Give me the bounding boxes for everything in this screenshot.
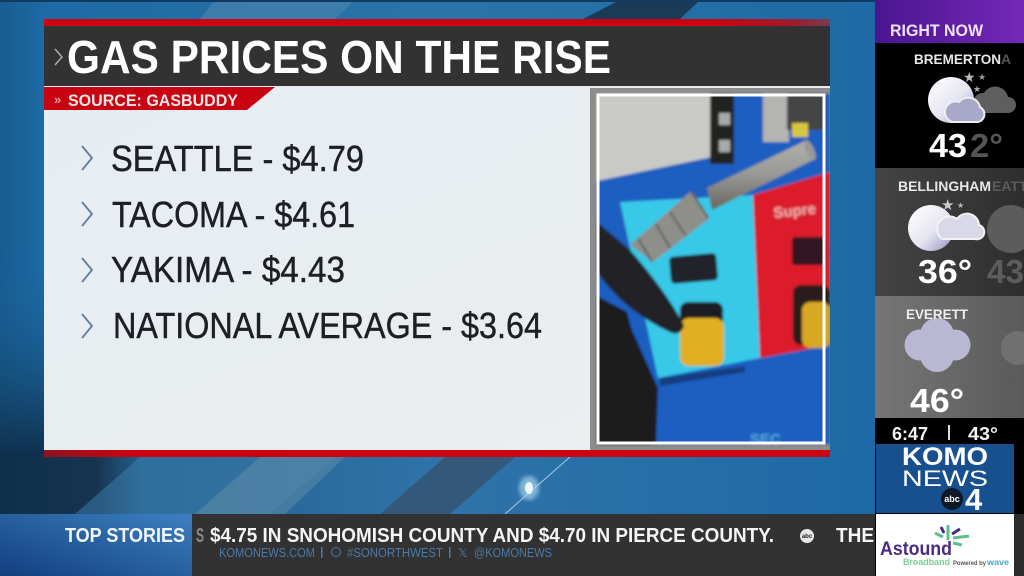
weather: Bellingham	[875, 168, 1024, 296]
weather: Bremerton: 2°	[970, 127, 1003, 164]
title bar	[44, 26, 830, 86]
panel: gas prices graphic	[44, 19, 830, 457]
right now header: RIGHT NOW	[890, 21, 984, 40]
item: Tacoma: TACOMA - $4.61	[112, 194, 355, 235]
weather: Bremerton: BREMERTON	[914, 51, 1001, 67]
source tag: »	[54, 92, 61, 107]
logo: Astound Broadband: wave	[986, 558, 1010, 567]
icon: moon and cloud	[928, 69, 1016, 123]
weather: Everett: EVERETT	[906, 306, 968, 322]
ticker: top stories	[0, 514, 875, 576]
icon: cloud	[904, 318, 970, 372]
weather: Bellingham: 36°	[918, 253, 972, 290]
ticker: top stories: THE	[836, 525, 874, 547]
icon: moon and cloud: ★	[941, 197, 954, 214]
logo: KOMO News 4: KOMO	[902, 443, 988, 471]
source tag: SOURCE: GASBUDDY	[68, 91, 239, 110]
time and temperature	[875, 418, 1024, 444]
bottom red stripe	[44, 450, 830, 457]
logo: KOMO News 4	[876, 443, 1014, 517]
weather: Bellingham: 43	[987, 253, 1024, 290]
right now header	[875, 0, 1024, 43]
photo: gas pump nozzle	[590, 88, 830, 450]
logo: KOMO News 4: NEWS	[902, 466, 988, 491]
ticker headline: S	[196, 525, 204, 547]
logo: Astound Broadband: Astound	[880, 539, 952, 560]
studio background	[0, 0, 875, 514]
photo: gas pump nozzle: Supre	[773, 201, 817, 222]
weather: Bremerton: 43	[929, 127, 967, 164]
photo: gas pump nozzle: SEC	[750, 431, 781, 448]
lens flare	[505, 457, 570, 514]
price list	[82, 138, 542, 346]
logo: Astound Broadband	[876, 514, 1024, 576]
title chevron	[55, 49, 62, 65]
logo: Astound Broadband: Powered by	[953, 561, 987, 567]
ticker: top stories: @KOMONEWS	[474, 545, 552, 560]
panel body	[44, 86, 830, 451]
abc bug	[800, 529, 814, 543]
item: National average: NATIONAL AVERAGE - $3.64	[113, 305, 542, 346]
logo: KOMO News 4: abc	[944, 494, 960, 504]
logo: Astound Broadband: Broadband	[903, 557, 950, 567]
abc bug: abc	[802, 534, 813, 540]
ticker: top stories: 𝕏	[458, 546, 468, 560]
nozzle spout	[707, 140, 813, 210]
social line: KOMONEWS.COM	[219, 545, 315, 560]
icon: moon and cloud: ★	[978, 72, 986, 82]
top red stripe	[44, 19, 830, 26]
sidebar: weather	[875, 0, 1024, 576]
weather: Bremerton: A	[1001, 51, 1011, 67]
ticker: top stories: $4.75 IN SNOHOMISH COUNTY AND $4.70 IN PIERCE COUNTY.	[210, 525, 774, 547]
ticker: top stories: #SONORTHWEST	[347, 545, 443, 560]
source tag	[44, 87, 275, 110]
weather: Everett: 46°	[910, 382, 964, 419]
weather: Bellingham: BELLINGHAM	[898, 178, 991, 194]
icon: moon and cloud: ★	[957, 201, 964, 210]
icon: moon and cloud: ★	[963, 69, 976, 85]
weather: Everett	[875, 296, 1024, 419]
title: GAS PRICES ON THE RISE	[67, 31, 611, 83]
time and temperature: 43°	[968, 424, 998, 444]
weather: Bremerton	[875, 43, 1024, 168]
icon: moon and cloud	[908, 197, 1024, 253]
item: Yakima: YAKIMA - $4.43	[111, 249, 345, 290]
item: Seattle: SEATTLE - $4.79	[111, 138, 364, 179]
icon: moon and cloud: ★	[973, 84, 981, 94]
logo: KOMO News 4: 4	[965, 482, 983, 517]
time and temperature: 6:47	[892, 424, 928, 444]
nozzle handle	[597, 222, 684, 333]
ticker label: TOP STORIES	[65, 525, 185, 547]
